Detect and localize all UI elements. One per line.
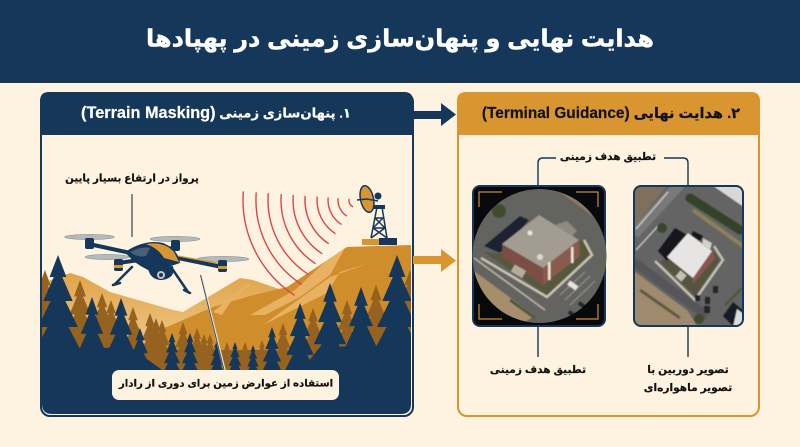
body: [125, 242, 180, 270]
top label: ground target matching: تطبیق هدف زمینی: [560, 151, 656, 163]
drone label leader: [131, 194, 133, 237]
propellers: [64, 234, 249, 262]
panel heading: terminal guidance: [457, 92, 760, 135]
aerial view of building: [472, 189, 606, 323]
drone label: پرواز در ارتفاع بسیار پایین: [65, 174, 199, 185]
panel: terrain masking: [28, 92, 427, 416]
label: camera image with satellite image: تصویر دوربین با: [647, 364, 729, 376]
mountain highlights: [213, 248, 370, 325]
icon: radar tower: [357, 184, 397, 245]
icon: drone: [64, 234, 249, 293]
callout: استفاده از عوارض زمین برای دوری از رادار: [118, 379, 333, 390]
camera: [148, 266, 174, 280]
arrow: navy to terminal guidance: [413, 103, 456, 126]
back mountains: [42, 273, 279, 344]
motors: [85, 238, 227, 272]
label: camera image with satellite image: تصویر ماهواره‌ای: [644, 382, 732, 394]
title banner: هدایت نهایی و پنهان‌سازی زمینی در پهپادها: [146, 25, 654, 52]
image: satellite view: [634, 184, 745, 328]
bracket connector: [538, 158, 688, 186]
brown tree line: [42, 270, 411, 370]
image: camera lens view: [470, 185, 610, 330]
panel heading: terrain masking: [40, 92, 413, 135]
callout: [112, 370, 339, 400]
panel: terminal guidance: [457, 92, 760, 416]
landing legs: [113, 267, 190, 293]
label: ground target matching: تطبیق هدف زمینی: [490, 364, 586, 376]
connector lines: [538, 327, 688, 357]
radar waves: [243, 192, 353, 295]
panel heading: terminal guidance: ۲. هدایت نهایی (Terminal Guidance): [482, 105, 740, 122]
callout leader line: [200, 275, 225, 372]
title banner: [0, 0, 800, 83]
arms: [89, 244, 222, 267]
panel heading: terrain masking: ۱. پنهان‌سازی زمینی (Terrain Masking): [81, 104, 351, 122]
viewfinder corners: [479, 192, 598, 319]
label: camera image with satellite image: [644, 364, 732, 394]
arrow: gold to terminal guidance: [413, 249, 456, 272]
main mountain with radar hill: [164, 245, 411, 350]
navy tree line: [33, 255, 422, 416]
terrain scene: [28, 245, 427, 416]
